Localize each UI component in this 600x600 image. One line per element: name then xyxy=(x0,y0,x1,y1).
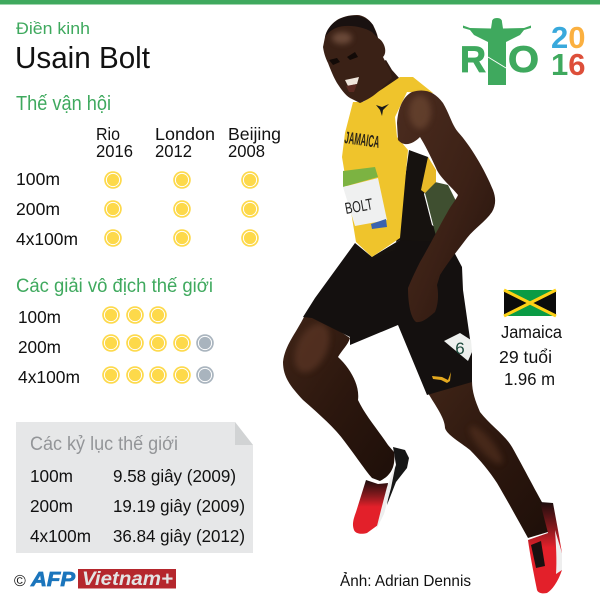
Vietnam+ logo: Vietnam+ xyxy=(82,569,173,590)
back shoe xyxy=(528,502,562,593)
shorts number patch xyxy=(444,333,472,361)
eyes and brow xyxy=(329,52,358,65)
neck xyxy=(360,60,400,103)
column: Rio 2016: Rio xyxy=(96,124,120,144)
row labels: 4x100m xyxy=(16,229,78,249)
row labels xyxy=(16,169,78,249)
shorts xyxy=(303,235,472,395)
kicker: sport: Điền kinh xyxy=(16,19,90,38)
row labels: 200m xyxy=(16,199,60,219)
back leg xyxy=(428,380,551,538)
record rows: 9.58 giây (2009) xyxy=(113,466,236,486)
column: London 2012: 2012 xyxy=(155,141,192,161)
jersey side panel xyxy=(365,150,446,262)
age: 29 tuổi xyxy=(499,347,552,367)
record rows: 100m xyxy=(30,466,73,486)
mouth xyxy=(345,77,359,86)
hair xyxy=(325,16,378,38)
record rows: 4x100m xyxy=(30,526,91,546)
Christ statue xyxy=(463,18,531,85)
back leg highlight xyxy=(465,422,507,468)
bib name: BOLT xyxy=(344,196,374,218)
heading: Olympics: Thế vận hội xyxy=(16,92,111,115)
medals grid xyxy=(104,171,259,247)
jersey xyxy=(342,77,433,257)
folded corner xyxy=(235,422,253,445)
country: Jamaica xyxy=(501,322,562,342)
head xyxy=(323,15,392,103)
AFP logo: AFP xyxy=(30,569,76,591)
Jamaica flag xyxy=(504,290,556,316)
top bar xyxy=(0,0,600,4)
sash line xyxy=(488,57,506,68)
puma logo xyxy=(432,372,451,383)
medals xyxy=(102,306,214,384)
year 16: 6 xyxy=(568,47,586,82)
athlete photo illustration xyxy=(283,15,562,593)
panel: Olympic medals xyxy=(16,92,281,249)
record rows xyxy=(30,466,245,546)
panel: world championships xyxy=(16,276,214,387)
row labels: 100m xyxy=(16,169,60,189)
row labels: 4x100m xyxy=(18,367,80,387)
title: Usain Bolt xyxy=(15,40,150,75)
record rows: 36.84 giây (2012) xyxy=(113,526,245,546)
record rows: 19.19 giây (2009) xyxy=(113,496,245,516)
panel: athlete profile xyxy=(499,290,562,389)
card background xyxy=(16,422,253,553)
column: Beijing 2008: 2008 xyxy=(228,141,265,161)
front leg xyxy=(283,315,394,481)
row labels: 200m xyxy=(18,337,61,357)
row labels xyxy=(18,307,80,387)
column: Beijing 2008 xyxy=(228,124,281,161)
column: London 2012 xyxy=(155,124,215,161)
row labels: 100m xyxy=(18,307,61,327)
copyright: © xyxy=(14,573,26,590)
heading: world records: Các kỷ lục thế giới xyxy=(30,434,178,455)
column: Rio 2016 xyxy=(96,124,133,161)
forehead highlight xyxy=(332,32,352,44)
shorts number: 6 xyxy=(455,339,465,358)
athlete photo illustration: JAMAICA xyxy=(343,128,381,152)
photo credit: Ảnh: Adrian Dennis xyxy=(340,573,471,590)
letter R: R xyxy=(460,39,486,80)
footer logos xyxy=(14,569,176,591)
thigh highlight xyxy=(287,318,337,378)
chest puma logo xyxy=(376,104,389,116)
column: Beijing 2008: Beijing xyxy=(228,124,281,144)
height: 1.96 m xyxy=(504,369,555,389)
year 20: 0 xyxy=(568,20,586,55)
column: London 2012: London xyxy=(155,124,215,144)
heading: world championships: Các giải vô địch thế giới xyxy=(16,276,213,297)
arm xyxy=(397,90,495,322)
column: Rio 2016: 2016 xyxy=(96,141,133,161)
year 20: 2 xyxy=(551,20,568,55)
front shoe xyxy=(353,480,388,534)
bib xyxy=(343,167,387,229)
Rio 2016 logo xyxy=(460,18,586,85)
year 16: 1 xyxy=(551,47,568,82)
panel: world records xyxy=(16,422,253,553)
record rows: 200m xyxy=(30,496,73,516)
shoulder highlight xyxy=(409,95,431,129)
letter O: O xyxy=(508,39,539,80)
